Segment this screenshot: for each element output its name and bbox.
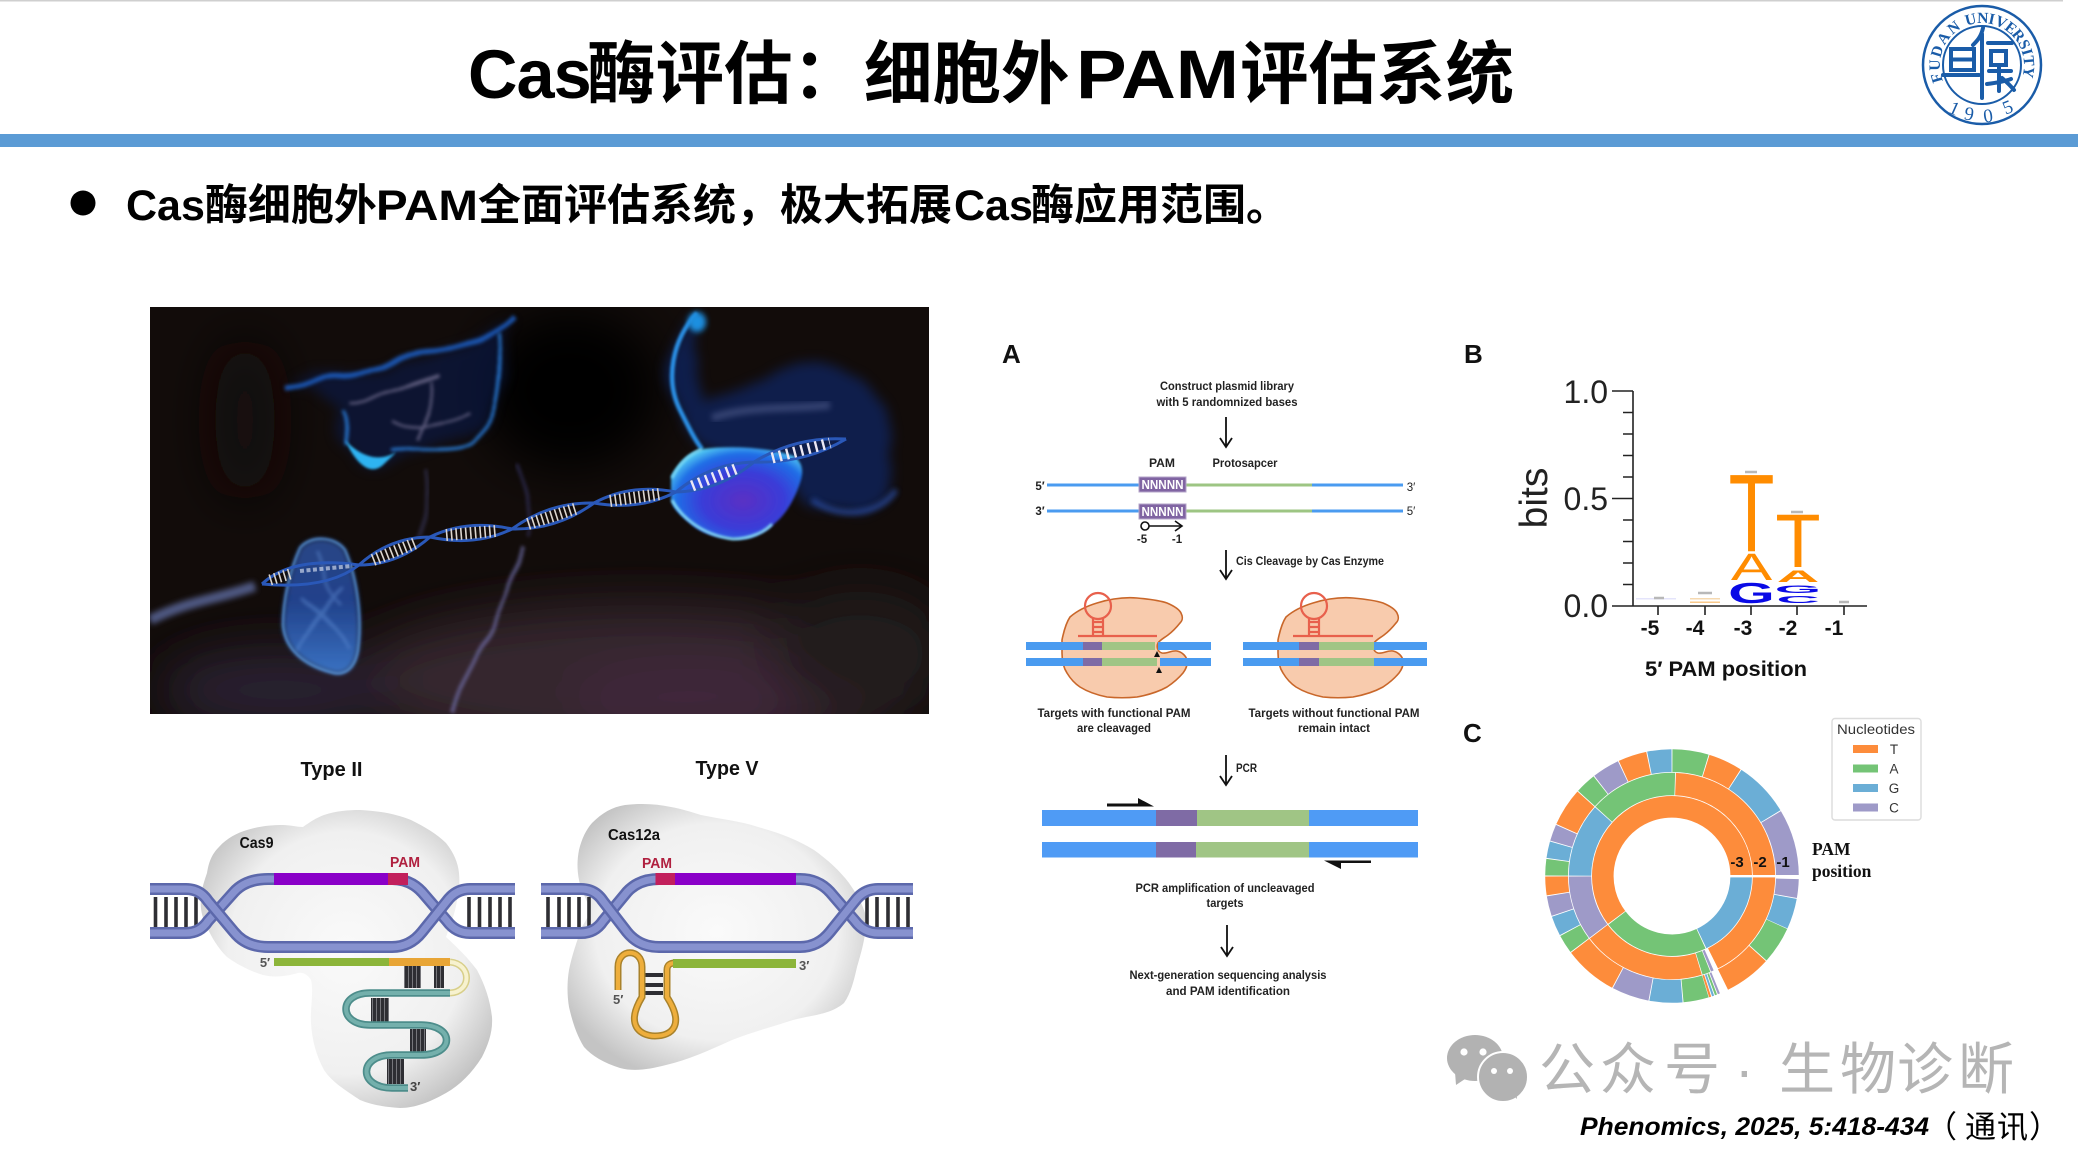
step text: cleavage: Cis Cleavage by Cas Enzyme — [1236, 556, 1384, 568]
jelly: lower left — [283, 539, 359, 673]
subheading — [126, 182, 1289, 230]
logo letters: C — [1776, 594, 1820, 605]
logo: Fudan University seal: N — [1944, 18, 1964, 38]
logo: Fudan University seal: Y — [2019, 65, 2037, 79]
DNA helix — [262, 439, 846, 585]
Cas9 protein — [201, 810, 492, 1108]
outer ring: position -1 — [1509, 713, 1835, 1039]
panel: Type II Cas9: 5′ — [260, 955, 270, 970]
photo: Cas enzymes on DNA — [150, 307, 929, 714]
step text: library — [1156, 381, 1298, 409]
logo: Fudan University seal: V — [1992, 12, 2010, 33]
enzyme: intact target — [1243, 593, 1427, 698]
Cas9 label: Cas9 — [240, 835, 274, 852]
step text: amplification: PCR amplification of uncleavaged — [1136, 883, 1314, 895]
logo letters: G — [1775, 583, 1821, 596]
panel: Type V Cas12a: 3′ — [799, 958, 809, 973]
axes and ticks — [1612, 391, 1867, 615]
y axis labels: 1.0 — [1564, 374, 1608, 410]
base pairs — [548, 897, 908, 927]
legend: nucleotides: A — [1889, 762, 1899, 776]
photo haze — [151, 311, 929, 714]
legend: nucleotides: C — [1889, 800, 1899, 816]
logo: Fudan University seal: S — [2014, 37, 2033, 52]
panel: Type V Cas12a: PAM — [642, 855, 672, 872]
y axis labels — [1564, 374, 1608, 624]
panel C: nested donut chart — [1463, 713, 1921, 1039]
logo letters: G — [1728, 577, 1775, 609]
crRNA — [644, 973, 663, 977]
logo: Fudan University seal: I — [2018, 47, 2036, 57]
title: 细胞外 — [864, 36, 1070, 113]
legend: nucleotides — [1832, 718, 1921, 820]
captions: targets — [1038, 708, 1420, 735]
label C: C — [1463, 718, 1482, 748]
logo: Fudan University seal: R — [2008, 26, 2029, 46]
construct diagram: 3′ — [1035, 506, 1045, 518]
captions: targets: Targets without functional PAM — [1248, 708, 1420, 720]
label B: B — [1464, 339, 1483, 369]
panel: Type II Cas9: 3′ — [410, 1079, 420, 1094]
x axis labels: -3 — [1734, 617, 1752, 640]
ring labels: -1 — [1776, 854, 1790, 871]
y axis title: bits — [1513, 468, 1556, 528]
panel B: PAM sequence logo — [1464, 339, 1867, 681]
subheading: 全面评估系统， — [478, 182, 779, 230]
citation: （通讯） — [1926, 1110, 2060, 1145]
step text: sequencing: and PAM identification — [1166, 986, 1290, 998]
logo: Fudan University seal: U — [1963, 10, 1978, 29]
header bar — [0, 134, 2078, 147]
ring labels: -2 — [1753, 854, 1767, 871]
arrow — [1220, 417, 1232, 447]
arrow: cis cleavage — [1220, 550, 1232, 579]
top hairline — [0, 0, 2063, 2]
logo: Fudan University seal: E — [2001, 18, 2020, 38]
PCR amplicons — [1042, 798, 1418, 869]
x axis title: 5′ PAM position — [1645, 658, 1807, 681]
subheading: PAM — [376, 182, 478, 230]
panel: Type V Cas12a: 5′ — [613, 992, 623, 1007]
captions: targets: remain intact — [1298, 723, 1370, 735]
y axis labels: 0.0 — [1564, 588, 1608, 624]
logo letters: T — [1775, 498, 1821, 583]
logo: Fudan University seal: 5 — [2000, 96, 2016, 119]
zero-angle gap — [1730, 875, 1800, 877]
title: PAM — [1076, 36, 1239, 113]
step text: library: Construct plasmid library — [1160, 381, 1295, 393]
y axis labels: 0.5 — [1564, 481, 1608, 517]
subheading: Cas酶细胞外 — [126, 182, 377, 230]
x axis labels — [1641, 617, 1844, 640]
logo: Fudan University seal: 9 — [1962, 103, 1975, 126]
arrow: sequencing — [1221, 925, 1233, 956]
step text: PCR: PCR — [1236, 763, 1258, 775]
legend: nucleotides: G — [1889, 781, 1899, 796]
ring labels — [1730, 854, 1790, 871]
label A: A — [1002, 339, 1021, 369]
legend: nucleotides: Nucleotides — [1837, 721, 1915, 737]
middle ring: position -2 — [1542, 746, 1802, 1006]
panel: Type V Cas12a — [541, 758, 913, 1070]
title — [468, 36, 1514, 113]
title: Cas — [468, 36, 591, 113]
x axis labels: -2 — [1779, 617, 1797, 640]
construct diagram: PAM — [1149, 458, 1175, 470]
logo: Fudan University seal: D — [1928, 44, 1947, 59]
heading: Type V: Type V — [696, 758, 759, 780]
jelly: right smoke — [672, 312, 898, 513]
light streaks — [150, 465, 531, 712]
jelly: upper left — [288, 316, 518, 471]
logo: Fudan University seal: 0 — [1982, 105, 1994, 128]
panel A: PAM assay workflow — [1002, 339, 1427, 998]
subheading: Cas — [954, 182, 1033, 230]
donut rings — [1509, 713, 1835, 1039]
panel: Type II Cas9 — [150, 759, 515, 1108]
step text: library: with 5 randomnized bases — [1156, 397, 1298, 409]
annotation: PAM position — [1812, 839, 1872, 881]
guide RNA — [450, 962, 466, 993]
title: 酶评估： — [587, 36, 861, 113]
logo: Fudan University seal: N — [1977, 10, 1989, 27]
watermark text: 公众号·生物诊断 — [1539, 1038, 2014, 1101]
logo: Fudan University seal: F — [1928, 71, 1947, 85]
step text: amplification — [1136, 883, 1314, 910]
x axis labels: -4 — [1686, 617, 1705, 640]
captions: targets: are cleavaged — [1077, 723, 1151, 735]
inner ring: position -3 — [1575, 779, 1769, 973]
jelly: bright bulb — [671, 447, 802, 539]
captions: targets: Targets with functional PAM — [1038, 708, 1190, 720]
tracrRNA stems — [404, 966, 421, 988]
construct diagram: Protosapcer — [1212, 458, 1278, 470]
arrow: PCR — [1220, 755, 1232, 785]
logo: Fudan University seal — [1923, 6, 2041, 128]
x axis labels: -1 — [1825, 617, 1844, 640]
step text: sequencing: Next-generation sequencing analysis — [1130, 970, 1326, 982]
bullet — [70, 190, 96, 216]
ring labels: -3 — [1730, 854, 1744, 871]
construct diagram: 3′ — [1407, 482, 1415, 494]
construct diagram: -5 — [1137, 534, 1148, 546]
logo letters — [1636, 452, 1849, 609]
annotation: PAM position: PAM — [1812, 839, 1851, 859]
construct diagram: 5′ — [1407, 506, 1415, 518]
watermark: WeChat icon — [1447, 1035, 1528, 1102]
target strand and PAM — [656, 873, 675, 885]
logo: Fudan University seal: I — [1987, 11, 1996, 28]
x axis labels: -5 — [1641, 617, 1660, 640]
DNA strands — [150, 879, 515, 947]
construct diagram: NNNNN — [1142, 505, 1184, 519]
logo: Fudan University seal: T — [2019, 55, 2037, 67]
panel: Type II Cas9: PAM — [390, 854, 420, 871]
logo: Fudan University seal: A — [1934, 28, 1955, 48]
legend: nucleotides: T — [1890, 742, 1898, 757]
logo letters: T — [1729, 452, 1774, 574]
logo letters: A — [1777, 567, 1819, 586]
Cas12a label: Cas12a — [608, 827, 660, 844]
citation: Phenomics, 2025, 5:418-434 — [1580, 1113, 1929, 1141]
base pairs — [156, 897, 510, 927]
DNA strands — [541, 879, 913, 947]
construct diagram — [1035, 458, 1415, 546]
annotation: PAM position: position — [1812, 861, 1872, 881]
step text: amplification: targets — [1206, 898, 1244, 910]
logo letters: A — [1731, 545, 1773, 588]
target strand and PAM — [274, 873, 388, 885]
logo: Fudan University seal: 1 — [1946, 97, 1963, 120]
citation — [1580, 1110, 2060, 1145]
subheading: 酶应用范围。 — [1031, 182, 1289, 230]
construct diagram: -1 — [1172, 534, 1183, 546]
enzyme: cleaved target — [1026, 593, 1211, 698]
subheading: 极大拓展 — [780, 182, 952, 230]
Cas12a protein — [568, 804, 866, 1070]
construct diagram: 5′ — [1035, 481, 1045, 493]
title: 评估系统 — [1240, 36, 1514, 113]
construct diagram: NNNNN — [1142, 478, 1184, 492]
logo: Fudan University seal: U — [1927, 59, 1944, 71]
heading: Type II: Type II — [300, 759, 362, 781]
step text: sequencing — [1130, 970, 1326, 998]
